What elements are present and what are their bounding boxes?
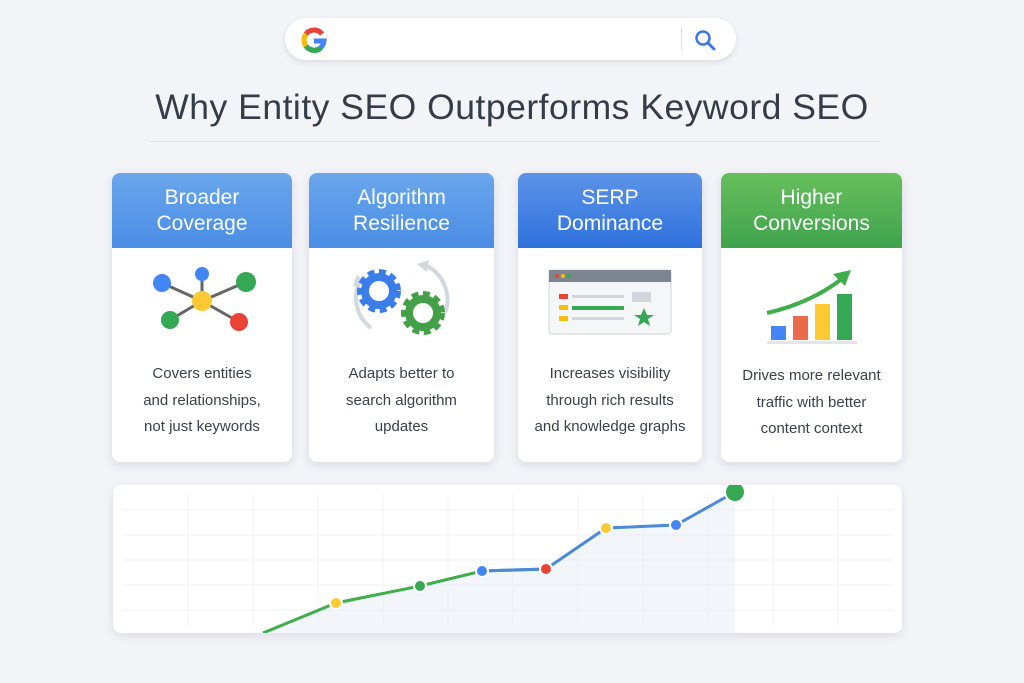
heading: Resilience [353, 212, 450, 234]
text: updates [375, 418, 428, 435]
heading [309, 173, 494, 248]
search bar [285, 18, 736, 60]
heading [721, 173, 902, 248]
line chart [263, 482, 745, 633]
icon: gears [353, 260, 450, 335]
heading: Dominance [557, 212, 663, 234]
panel: algorithm resilience [309, 173, 494, 462]
text: Covers entities [152, 365, 252, 382]
icon: search [695, 30, 716, 51]
icon: google G [302, 28, 327, 53]
text [742, 367, 881, 437]
icon: entity network [153, 267, 256, 331]
heading: Broader [165, 186, 239, 208]
icon: browser with results [548, 270, 672, 334]
heading: Conversions [753, 212, 870, 234]
heading [112, 173, 292, 248]
heading [518, 173, 702, 248]
text: Increases visibility [550, 365, 670, 382]
icon: bar chart with arrow [766, 270, 857, 344]
text: content context [761, 420, 862, 437]
panel: higher conversions [721, 173, 902, 462]
text: and relationships, [143, 392, 261, 408]
text [535, 365, 685, 435]
heading: Algorithm [357, 186, 446, 208]
text: Adapts better to [349, 365, 454, 382]
title: Why Entity SEO Outperforms Keyword SEO [155, 87, 869, 127]
text: search algorithm [346, 392, 457, 408]
text [143, 365, 261, 435]
panel: growth line chart [113, 485, 902, 633]
text: not just keywords [144, 418, 260, 435]
panel: serp dominance [518, 173, 702, 462]
text: and knowledge graphs [535, 418, 685, 435]
text [346, 365, 457, 435]
text: through rich results [546, 392, 674, 408]
heading: SERP [581, 186, 639, 208]
heading: Coverage [156, 212, 248, 234]
panel: broader coverage [112, 173, 292, 462]
heading: Higher [781, 186, 842, 208]
text: Drives more relevant [742, 367, 881, 384]
text: traffic with better [757, 394, 866, 410]
